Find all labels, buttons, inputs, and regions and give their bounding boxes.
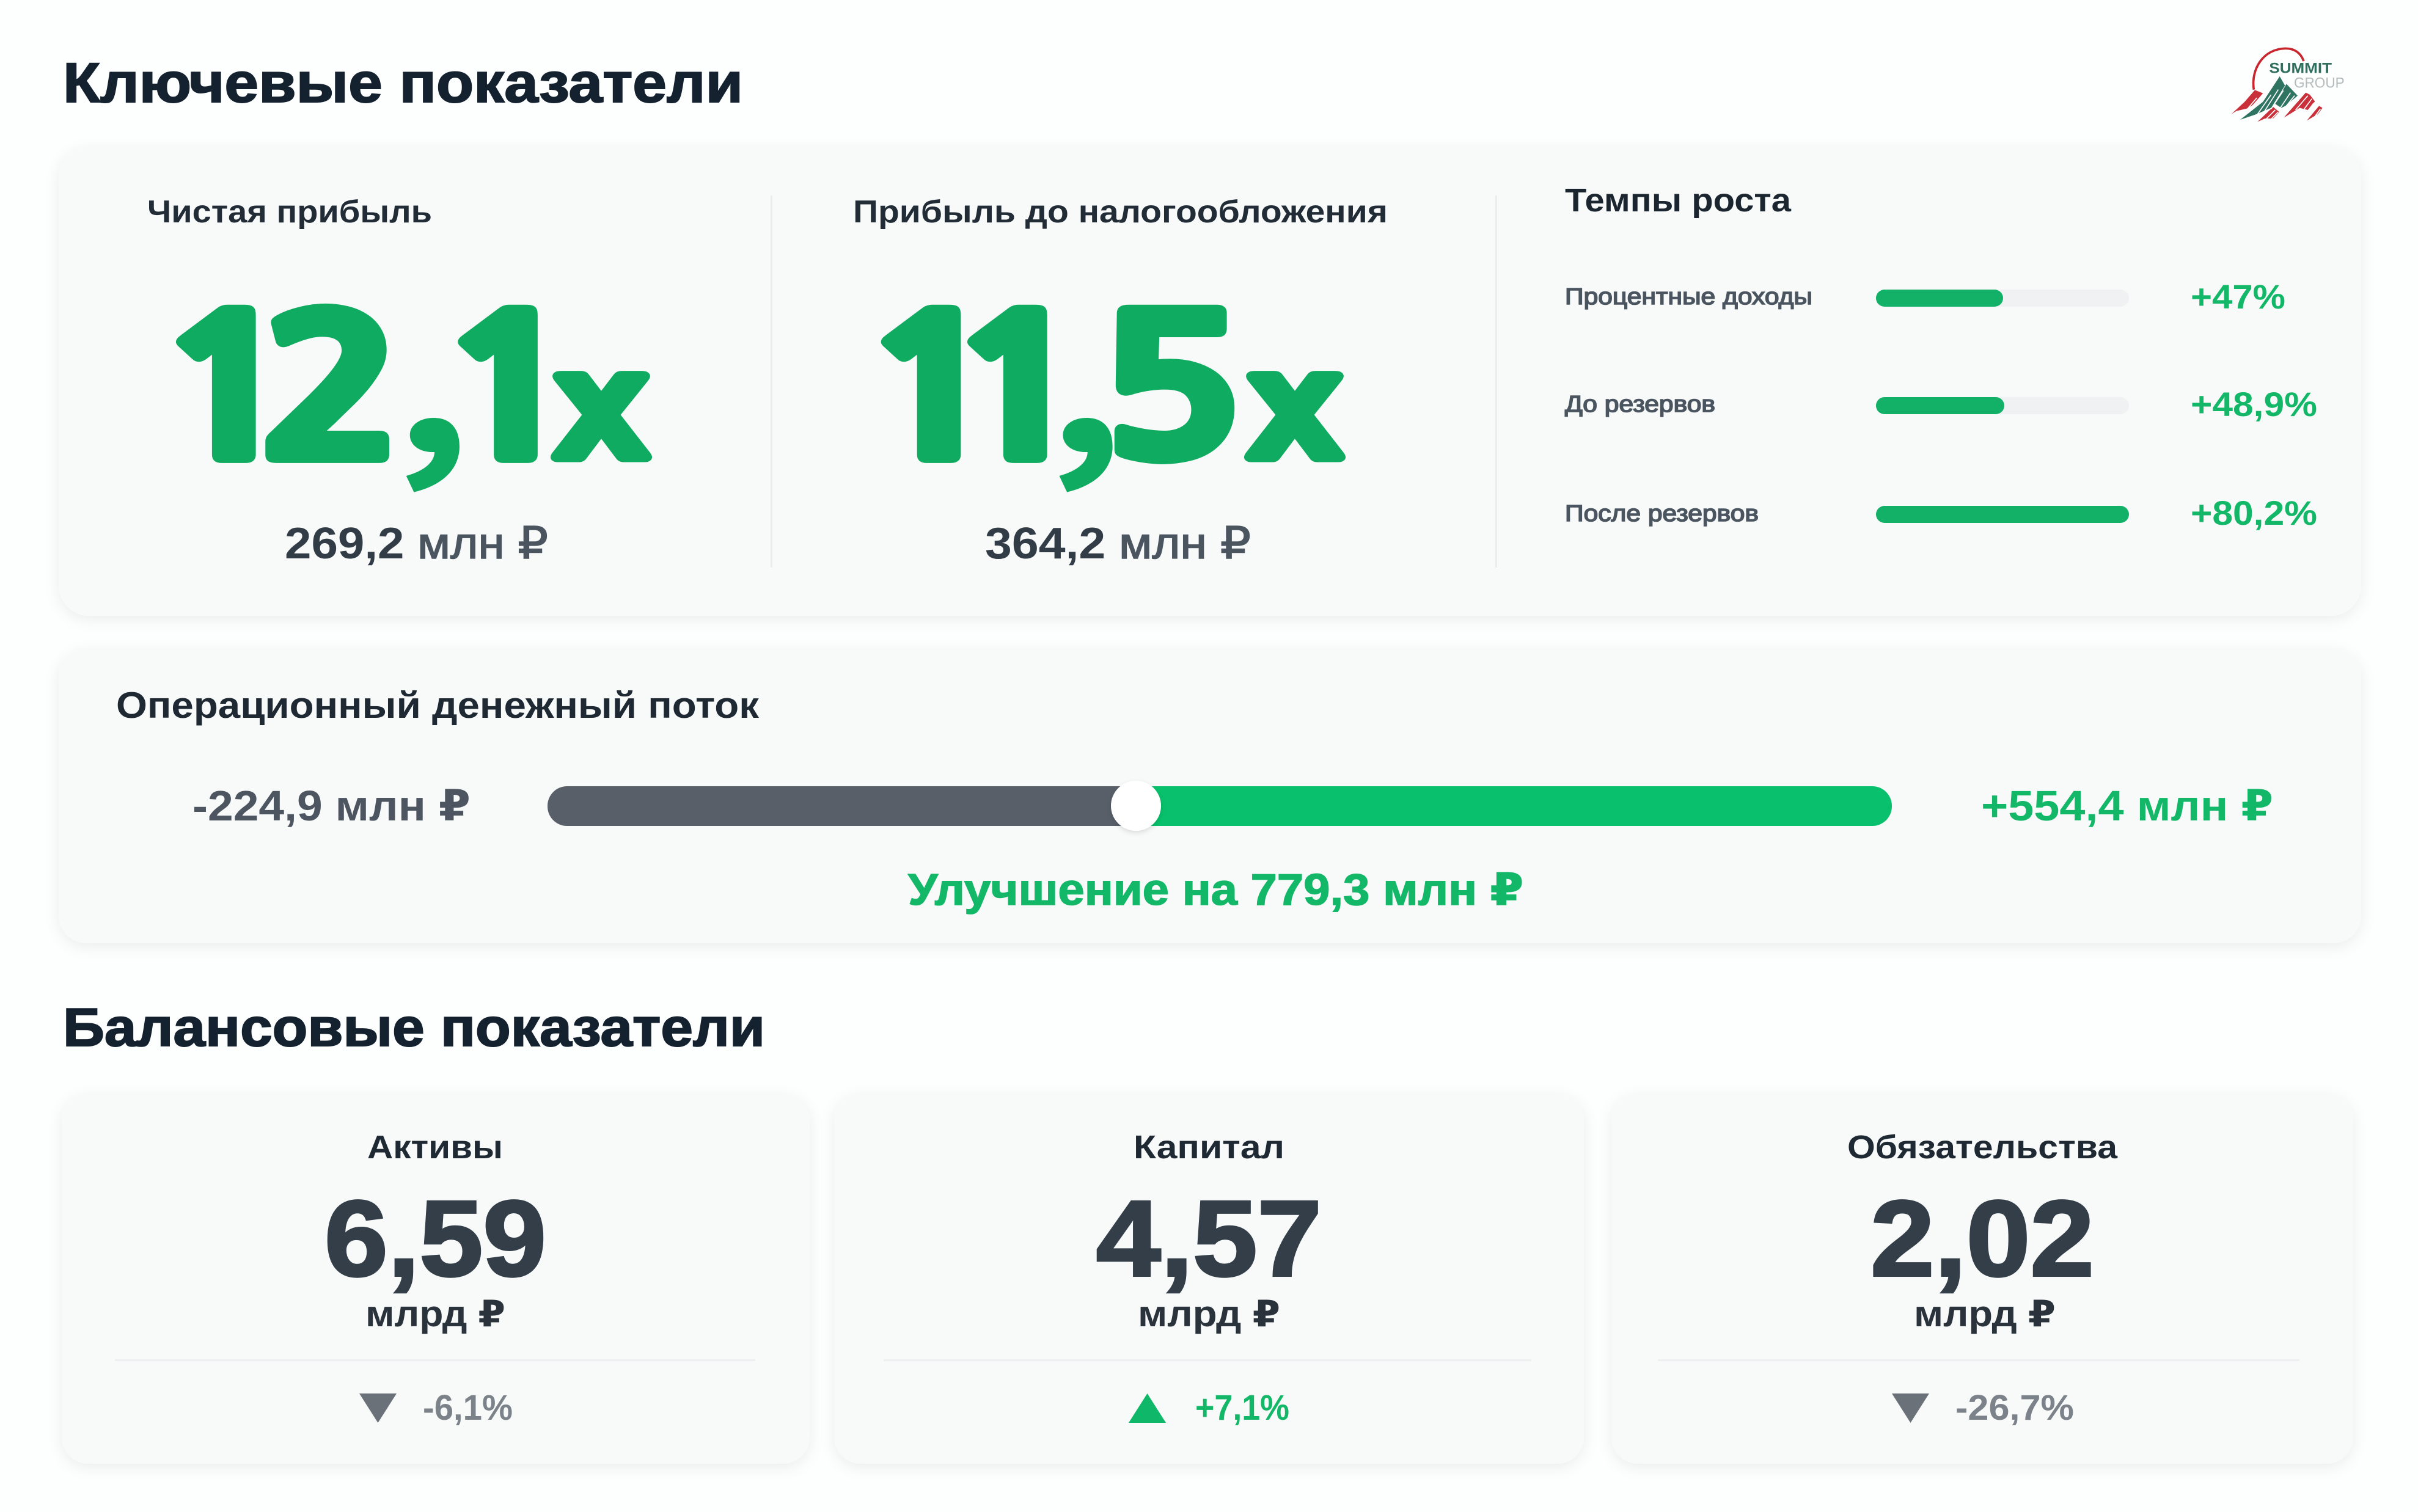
growth row: interest income: Процентные доходы [1565,284,1812,310]
icon: down triangle [1892,1393,1929,1423]
panel: capital [834,1094,1584,1464]
liabilities unit: млрд ₽ [1914,1293,2056,1334]
icon: Summit Group logo: GROUP [2294,75,2345,91]
assets unit: млрд ₽ [365,1293,505,1334]
icon: down triangle [359,1393,397,1423]
title: key indicators: Ключевые показатели [63,52,743,114]
cash flow heading: Операционный денежный поток [116,685,760,726]
growth row: interest income: +47% [2191,277,2285,316]
improvement callout: Улучшение на 779,3 млн ₽ [908,866,1523,915]
growth row: after reserves [1565,494,2317,532]
icon: Summit Group logo: SUMMIT [2269,60,2332,76]
icon: up triangle [1129,1393,1166,1423]
growth row: before reserves: До резервов [1565,392,1715,417]
panel: operating cash flow [59,649,2361,943]
pre-tax profit multiple: 11,5x [861,255,1343,503]
assets value: 6,59 [324,1179,546,1299]
pre-tax profit amount: 364,2 млн ₽ [985,519,1251,568]
growth row: interest income [1565,277,2285,316]
icon: Summit Group logo [2232,48,2345,122]
capital change: +7,1% [1195,1388,1289,1428]
growth row: after reserves: +80,2% [2191,494,2317,532]
assets label: Активы [367,1129,503,1166]
cash flow bar [548,781,1892,831]
capital value: 4,57 [1096,1179,1322,1299]
panel: key metrics [59,147,2361,616]
growth rates heading: Темпы роста [1565,182,1792,219]
capital label: Капитал [1134,1129,1284,1166]
growth row: before reserves: +48,9% [2191,385,2317,423]
cash flow end value: +554,4 млн ₽ [1981,782,2273,830]
net profit label: Чистая прибыль [147,194,432,230]
growth row: before reserves [1565,385,2317,423]
cash flow start value: -224,9 млн ₽ [192,782,471,830]
liabilities change: -26,7% [1955,1388,2074,1428]
title: balance indicators: Балансовые показатели [63,997,765,1057]
liabilities label: Обязательства [1847,1129,2118,1166]
net profit amount: 269,2 млн ₽ [285,519,548,568]
panel: liabilities [1611,1094,2353,1464]
net profit multiple: 12,1x [156,255,649,503]
pre-tax profit label: Прибыль до налогообложения [853,194,1388,230]
capital unit: млрд ₽ [1138,1293,1280,1334]
assets change: -6,1% [423,1388,513,1428]
growth row: after reserves: После резервов [1565,501,1759,527]
panel: assets [62,1094,810,1464]
liabilities value: 2,02 [1870,1179,2094,1299]
